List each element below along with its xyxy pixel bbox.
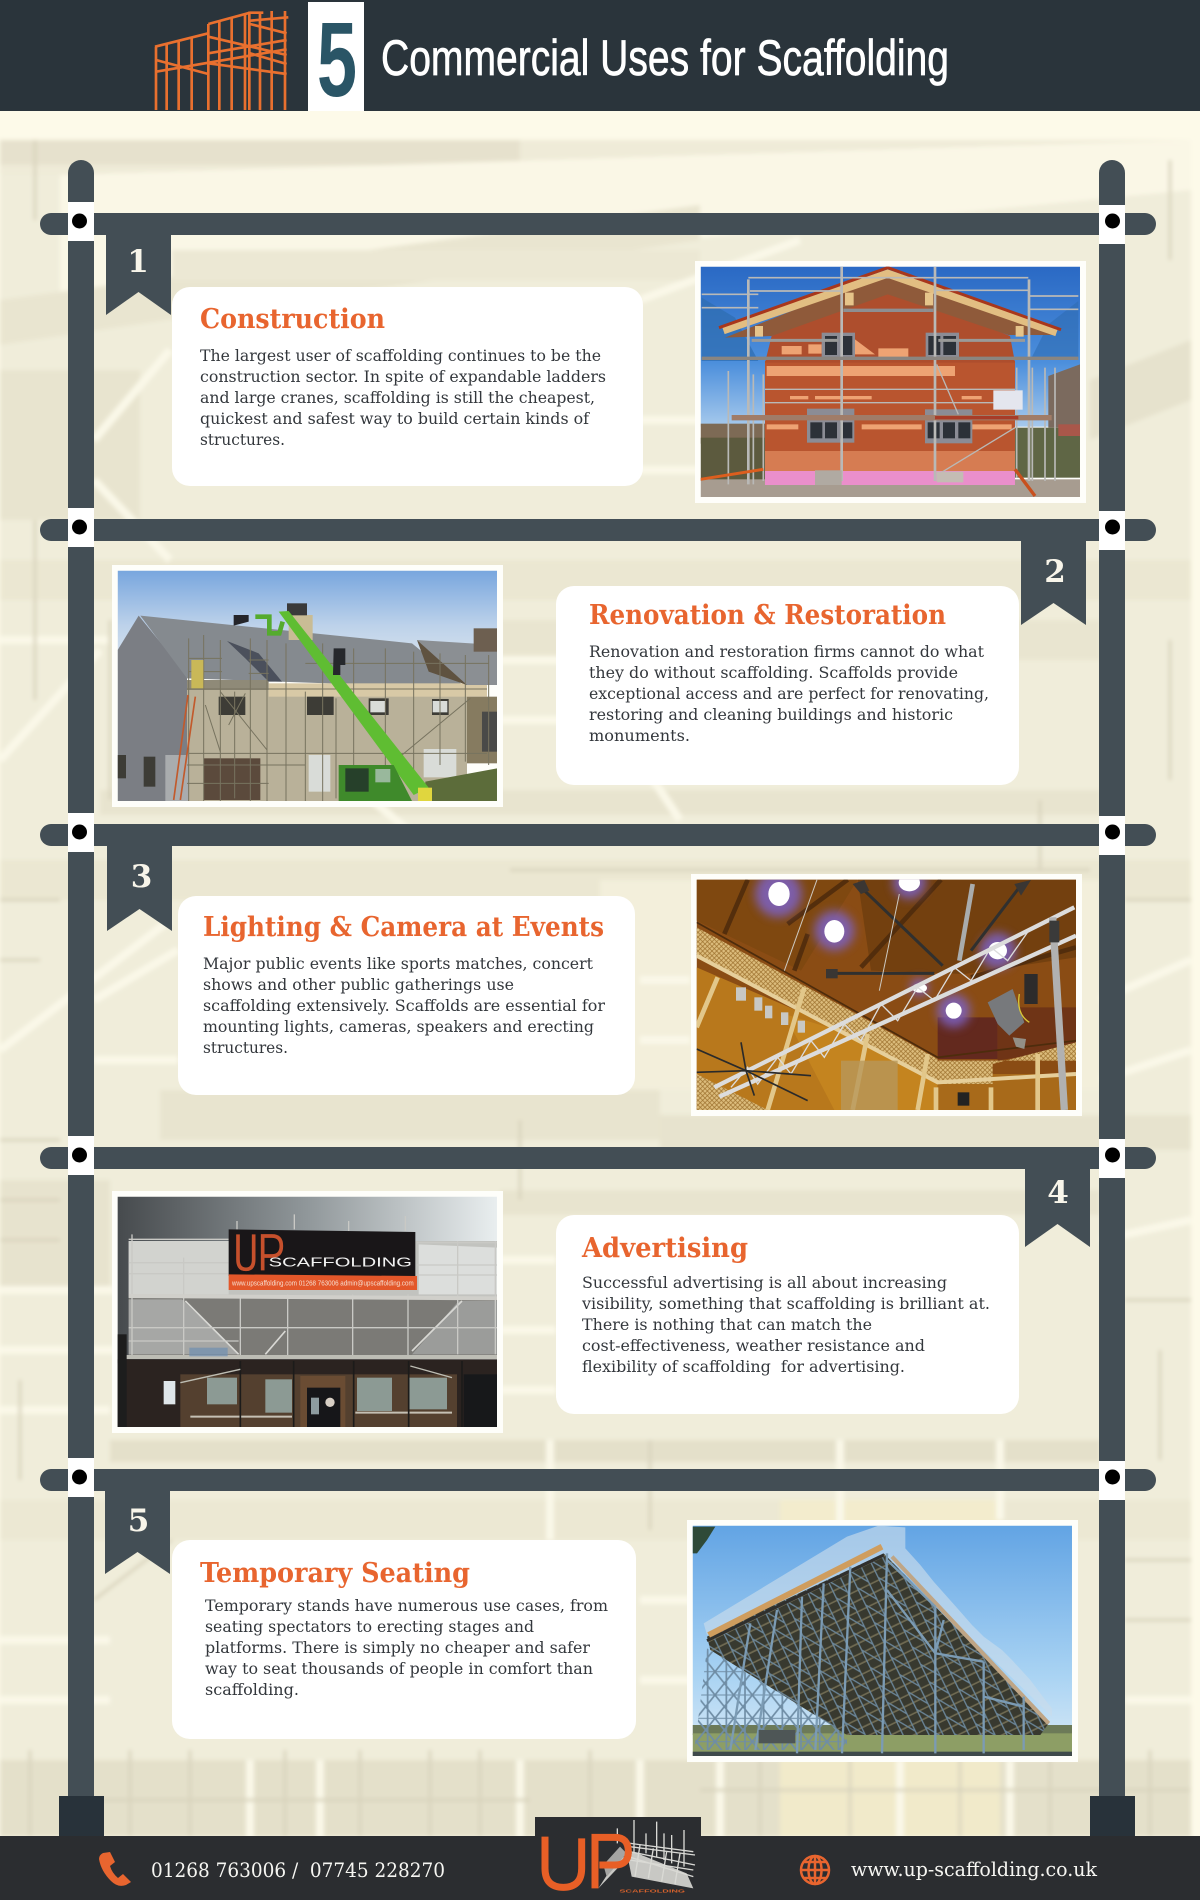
text: seating body: scaffolding. [205, 1680, 299, 1699]
photo: advertising banner on scaffolding: www.upscaffolding.com 01268 763006 admin@upscaffolding.com [231, 1280, 414, 1287]
text: construction body: The largest user of scaffolding continues to be the [200, 346, 601, 365]
footer bar [0, 1817, 1200, 1900]
photo: roof renovation with green boom lift [112, 565, 503, 807]
photo: advertising banner on scaffolding [112, 1191, 503, 1433]
post feet [59, 1796, 1135, 1837]
text: renovation body [589, 642, 989, 745]
photo: advertising banner on scaffolding: SCAFFOLDING [269, 1255, 412, 1269]
icon: phone [99, 1852, 131, 1886]
panel: lighting and camera [178, 896, 635, 1095]
text: construction body: and large cranes, scaffolding is still the cheapest, [200, 388, 595, 407]
icon: orange scaffolding [155, 11, 288, 110]
text: renovation body: restoring and cleaning buildings and historic [589, 705, 953, 724]
text: advertising body: flexibility of scaffolding for advertising. [582, 1357, 905, 1376]
text: advertising body: visibility, something that scaffolding is brilliant at. [581, 1294, 990, 1313]
text: renovation body: Renovation and restoration firms cannot do what [589, 642, 985, 661]
text: advertising body: Successful advertising is all about increasing [582, 1273, 947, 1292]
white connectors [68, 202, 1125, 1500]
panel: temporary seating [172, 1540, 636, 1739]
ribbon 1 [106, 235, 171, 315]
panel: advertising [556, 1215, 1019, 1414]
logo panel [535, 1817, 701, 1900]
text: renovation body: monuments. [589, 726, 690, 745]
text: seating body [205, 1596, 608, 1699]
heading: construction: Construction [200, 304, 385, 335]
right post [1099, 160, 1125, 1800]
photo: house under construction with scaffolding [695, 261, 1086, 503]
photo: lighting truss in a hall [691, 866, 1082, 1116]
ribbon 2 [1021, 541, 1086, 625]
heading: renovation: Renovation & Restoration [589, 600, 946, 631]
text: seating body: way to seat thousands of people in comfort than [205, 1659, 593, 1678]
ribbon 3 [107, 846, 172, 931]
ribbon 4 [1025, 1169, 1090, 1247]
number five badge: 5 [317, 1, 357, 119]
crossbars [40, 213, 1156, 1491]
connector bolts [72, 214, 1120, 1484]
text: lighting body: mounting lights, cameras, speakers and erecting [203, 1017, 594, 1036]
text: renovation body: they do without scaffolding. Scaffolds provide [589, 663, 958, 682]
title: Commercial Uses for Scaffolding [381, 30, 949, 86]
icon: globe [801, 1856, 829, 1884]
ribbon 4: 4 [1047, 1175, 1069, 1211]
text: construction body: construction sector. In spite of expandable ladders [200, 367, 606, 386]
phone numbers: 01268 763006 / 07745 228270 [151, 1858, 445, 1882]
panel: construction [172, 287, 643, 486]
text: seating body: Temporary stands have numerous use cases, from [205, 1596, 608, 1615]
ribbon 5: 5 [128, 1503, 149, 1539]
number five badge [308, 1, 364, 119]
text: construction body: quickest and safest way to build certain kinds of [200, 409, 590, 428]
text: construction body: structures. [200, 430, 285, 449]
text: renovation body: exceptional access and are perfect for renovating, [589, 684, 989, 703]
text: seating body: seating spectators to erecting stages and [205, 1617, 534, 1636]
logo scaffold graphic [545, 1820, 695, 1895]
heading: temporary seating: Temporary Seating [200, 1558, 470, 1589]
ribbon 3: 3 [131, 859, 152, 895]
text: advertising body [581, 1273, 990, 1376]
text: lighting body: scaffolding extensively. Scaffolds are essential for [203, 996, 605, 1015]
panel: renovation and restoration [556, 586, 1019, 785]
text: lighting body: shows and other public gatherings use [203, 975, 514, 994]
photo: temporary grandstand seating [687, 1520, 1078, 1762]
text: seating body: platforms. There is simply no cheaper and safer [205, 1638, 590, 1657]
text: construction body [200, 346, 606, 449]
text: advertising body: cost-effectiveness, weather resistance and [582, 1336, 925, 1355]
heading: lighting: Lighting & Camera at Events [203, 912, 604, 943]
ribbon 5 [105, 1491, 170, 1574]
text: lighting body: Major public events like sports matches, concert [203, 954, 594, 973]
ribbon 2: 2 [1044, 554, 1066, 590]
logo scaffold graphic: SCAFFOLDING [619, 1889, 685, 1895]
heading: advertising: Advertising [581, 1233, 748, 1264]
text: lighting body [203, 954, 605, 1057]
website: www.up-scaffolding.co.uk [851, 1857, 1098, 1881]
left post [68, 160, 94, 1800]
text: lighting body: structures. [203, 1038, 288, 1057]
ribbon 1: 1 [127, 244, 149, 280]
text: advertising body: There is nothing that can match the [582, 1315, 872, 1334]
header bar [0, 0, 1200, 119]
